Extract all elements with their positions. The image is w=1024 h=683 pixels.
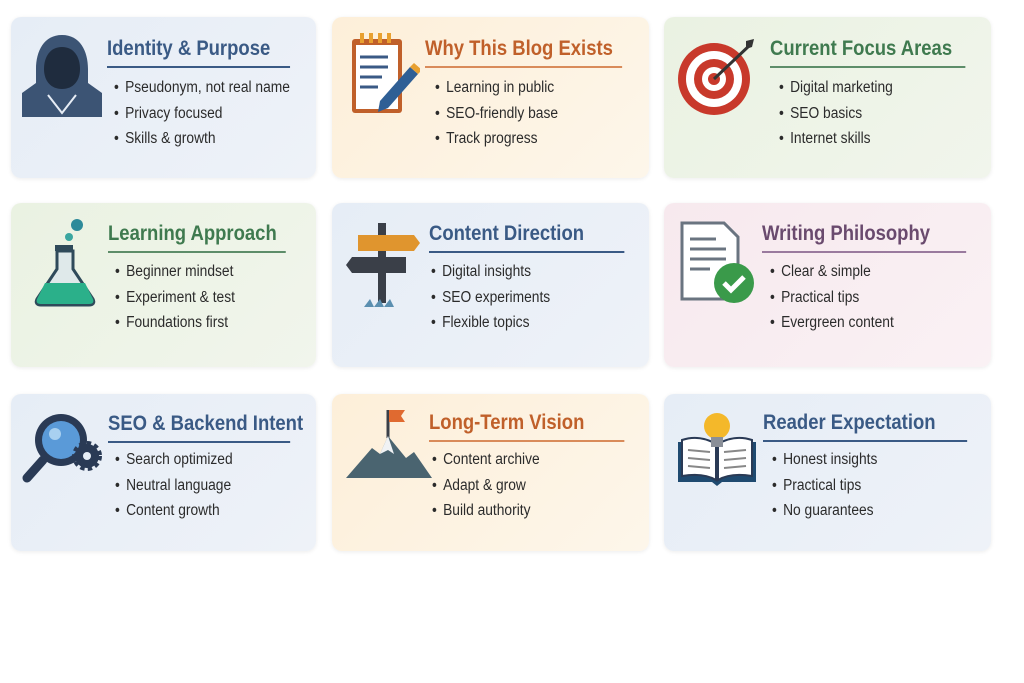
panel: writing philosophy xyxy=(664,203,991,367)
heading: Why This Blog Exists xyxy=(425,37,613,60)
heading: Current Focus Areas xyxy=(770,37,952,60)
bullets: SEO experiments xyxy=(442,288,550,306)
panel: reader expectation xyxy=(664,394,991,551)
panel: learning approach xyxy=(11,203,316,367)
bullets: Digital marketing xyxy=(790,79,893,96)
heading: Reader Expectation xyxy=(763,411,936,434)
heading: SEO & Backend Intent xyxy=(108,412,303,435)
bullets: Learning in public xyxy=(446,79,554,96)
heading: Learning Approach xyxy=(108,222,277,245)
bullets: Internet skills xyxy=(790,130,871,147)
heading xyxy=(763,411,967,442)
icon: magnifier with gear xyxy=(22,414,102,482)
heading xyxy=(770,37,965,68)
heading xyxy=(429,222,624,253)
icon: mountain with flag xyxy=(346,410,432,478)
heading xyxy=(762,222,966,253)
icon: open book with bulb xyxy=(678,413,756,486)
panel: why this blog exists xyxy=(332,17,649,178)
bullets: Track progress xyxy=(446,130,538,147)
bullets: Build authority xyxy=(443,502,530,519)
bullets: Search optimized xyxy=(126,451,233,468)
heading: Long-Term Vision xyxy=(429,411,584,434)
heading: Identity & Purpose xyxy=(107,37,270,60)
icon: target xyxy=(678,39,754,115)
panel: identity & purpose xyxy=(11,17,316,178)
bullets: Flexible topics xyxy=(442,314,529,331)
icon: document with check xyxy=(680,222,754,303)
bullets: Experiment & test xyxy=(126,288,235,306)
bullets: Foundations first xyxy=(126,314,228,331)
bullets: Practical tips xyxy=(781,288,859,306)
bullets: Practical tips xyxy=(783,476,861,494)
bullets: Evergreen content xyxy=(781,314,894,331)
bullets: Content archive xyxy=(443,451,540,468)
bullets xyxy=(780,79,893,147)
bullets xyxy=(770,263,894,331)
panel: seo & backend intent xyxy=(11,394,316,551)
bullets xyxy=(116,451,233,519)
icon: hooded figure xyxy=(22,35,102,117)
bullets xyxy=(432,263,550,331)
bullets xyxy=(114,79,290,147)
panel: current focus areas xyxy=(664,17,991,178)
heading: Writing Philosophy xyxy=(762,222,930,245)
panel: content direction xyxy=(332,203,649,367)
bullets: Digital insights xyxy=(442,263,531,280)
bullets: SEO basics xyxy=(790,104,862,122)
bullets: Content growth xyxy=(126,502,220,519)
bullets: Clear & simple xyxy=(781,263,871,280)
bullets: Adapt & grow xyxy=(443,476,526,494)
heading xyxy=(107,37,290,68)
bullets: Skills & growth xyxy=(125,130,216,147)
bullets: Beginner mindset xyxy=(126,263,233,280)
icon: signpost xyxy=(346,223,420,307)
bullets xyxy=(432,451,540,519)
heading xyxy=(429,411,624,442)
icon: flask xyxy=(34,219,96,306)
icon: notepad with pencil xyxy=(352,33,420,113)
bullets xyxy=(772,451,877,519)
bullets xyxy=(116,263,235,331)
bullets: SEO-friendly base xyxy=(446,104,558,122)
bullets: No guarantees xyxy=(783,502,874,519)
panel: long-term vision xyxy=(332,394,649,551)
bullets: Privacy focused xyxy=(125,104,222,122)
bullets: Neutral language xyxy=(126,476,231,494)
bullets: Pseudonym, not real name xyxy=(125,79,290,96)
bullets xyxy=(436,79,558,147)
heading: Content Direction xyxy=(429,222,584,245)
bullets: Honest insights xyxy=(783,451,877,468)
